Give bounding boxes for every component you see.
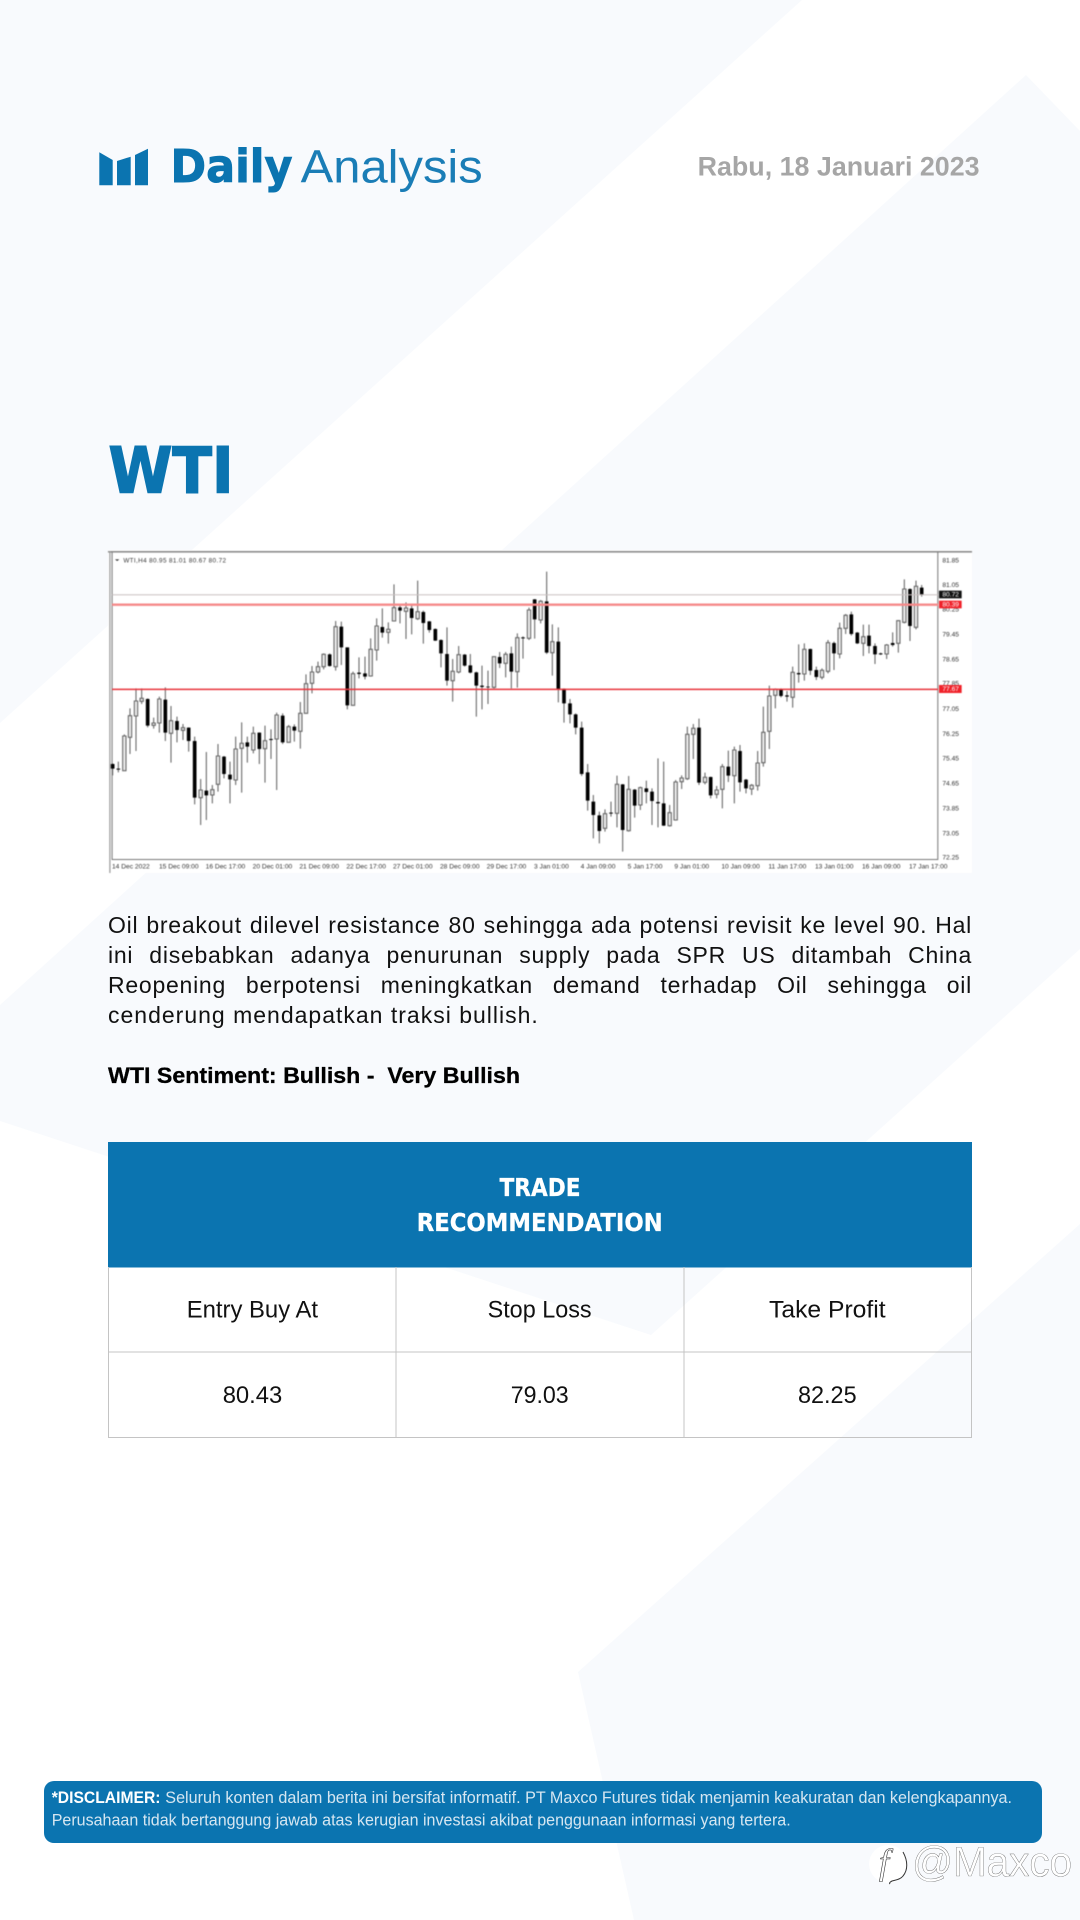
price axis: 80.39 (942, 602, 959, 609)
price axis: 77.67 (942, 686, 959, 693)
price axis: 78.65 (942, 656, 959, 663)
price axis: 77.05 (942, 706, 959, 713)
price axis: 76.25 (942, 731, 959, 738)
date: Rabu, 18 Januari 2023 (698, 152, 980, 182)
time axis (112, 863, 948, 870)
disclaimer banner: Perusahaan tidak bertanggung jawab atas kerugian investasi akibat penggunaan informasi yang tertera. (52, 1812, 791, 1830)
logo word: Analysis: Analysis (301, 140, 483, 192)
disclaimer banner (44, 1781, 1042, 1843)
chart: WTI H4 candlesticks (108, 550, 972, 873)
table row: values: 80.43 (223, 1382, 282, 1409)
table header (108, 1142, 972, 1268)
time axis: 10 Jan 09:00 (721, 863, 760, 870)
time axis: 5 Jan 17:00 (628, 863, 663, 870)
time axis: 20 Dec 01:00 (253, 863, 293, 870)
analysis paragraph: cenderung mendapatkan traksi bullish. (108, 1002, 539, 1028)
disclaimer banner: *DISCLAIMER: (52, 1789, 161, 1807)
icon: f bubble: f (879, 1842, 894, 1882)
price axis (939, 557, 962, 862)
price axis: 75.45 (942, 756, 959, 763)
icon: f bubble (869, 1842, 907, 1884)
time axis: 16 Dec 17:00 (206, 863, 246, 870)
table header: RECOMMENDATION (417, 1208, 663, 1237)
title: WTI: WTI (108, 435, 234, 508)
table row: values (223, 1382, 857, 1409)
table row: values: 79.03 (511, 1382, 569, 1409)
price axis: 72.25 (942, 855, 959, 862)
time axis: 15 Dec 09:00 (159, 863, 199, 870)
price axis: 81.05 (942, 582, 959, 589)
level lines (112, 594, 938, 690)
table row: labels: Entry Buy At (187, 1297, 318, 1324)
price axis: 74.65 (942, 780, 959, 787)
candles: right half (539, 572, 922, 852)
table row: values: 82.25 (798, 1382, 857, 1409)
price axis: 81.85 (942, 557, 959, 564)
logo: Daily Analysis (99, 140, 483, 193)
price axis: 79.45 (942, 632, 959, 639)
time axis: 14 Dec 2022 (112, 863, 150, 870)
analysis paragraph (108, 912, 972, 1028)
table header: TRADE (500, 1173, 580, 1202)
time axis: 11 Jan 17:00 (768, 863, 807, 870)
time axis: 28 Dec 09:00 (440, 863, 480, 870)
price axis: 73.05 (942, 830, 959, 837)
time axis: 21 Dec 09:00 (299, 863, 339, 870)
candles: left half (113, 581, 535, 825)
disclaimer banner: Seluruh konten dalam berita ini bersifat informatif. PT Maxco Futures tidak menjamin keakuratan dan kelengkapannya. (165, 1789, 1012, 1807)
time axis: 27 Dec 01:00 (393, 863, 433, 870)
price axis: 73.85 (942, 805, 959, 812)
price axis: 80.25 (942, 607, 959, 614)
table row: labels (187, 1297, 886, 1324)
analysis paragraph: Oil breakout dilevel resistance 80 sehingga ada potensi revisit ke level 90. Hal (108, 912, 972, 938)
time axis: 4 Jan 09:00 (581, 863, 616, 870)
table row: labels: Take Profit (769, 1297, 886, 1324)
analysis paragraph: ini disebabkan adanya penurunan supply pada SPR US ditambah China (108, 942, 972, 968)
icon: bar chart logo (99, 149, 148, 185)
time axis: 17 Jan 17:00 (909, 863, 948, 870)
analysis paragraph: Reopening berpotensi meningkatkan demand terhadap Oil sehingga oil (108, 972, 972, 998)
time axis: 13 Jan 01:00 (815, 863, 854, 870)
time axis: 9 Jan 01:00 (674, 863, 709, 870)
time axis: 29 Dec 17:00 (487, 863, 527, 870)
time axis: 3 Jan 01:00 (534, 863, 569, 870)
time axis: 16 Jan 09:00 (862, 863, 901, 870)
table row: labels: Stop Loss (488, 1297, 592, 1324)
chart header label: WTI,H4 80.95 81.01 80.67 80.72 (123, 557, 226, 564)
logo word: Daily: Daily (170, 140, 292, 193)
price axis: 77.85 (942, 681, 959, 688)
sentiment line: WTI Sentiment: Bullish - Very Bullish (108, 1063, 520, 1088)
time axis: 22 Dec 17:00 (346, 863, 386, 870)
table: trade recommendation (108, 1142, 972, 1438)
watermark: @Maxco: @Maxco (912, 1838, 1072, 1885)
price axis: 80.72 (942, 592, 959, 599)
